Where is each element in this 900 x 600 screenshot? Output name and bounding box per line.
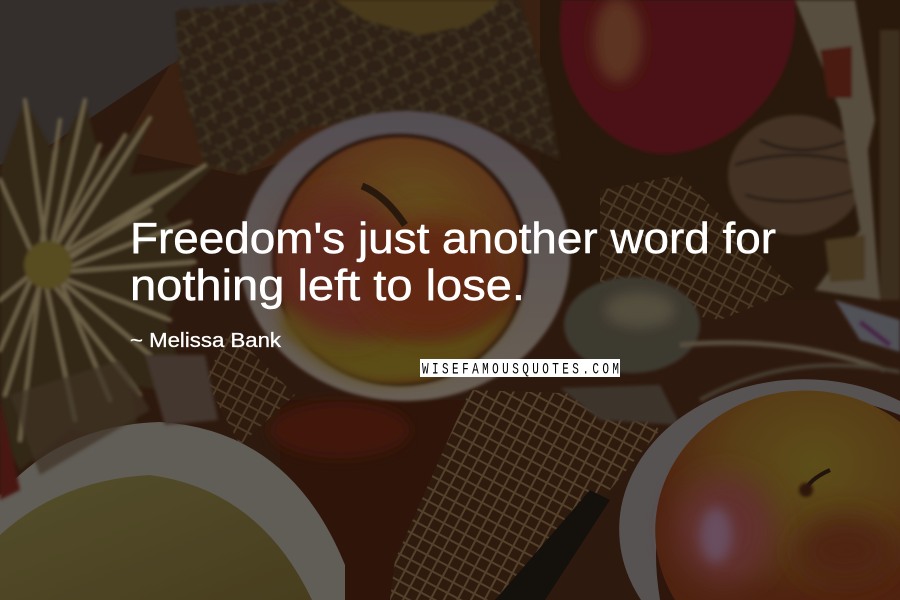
watermark logo: WISEFAMOUSQUOTES.COM	[422, 362, 619, 379]
quote text: Freedom's just another word for	[130, 214, 776, 263]
white bowl bottom left	[0, 422, 345, 600]
walnut	[728, 115, 864, 235]
folk fabric ribbon	[795, 0, 900, 352]
author attribution: ~ Melissa Bank	[130, 330, 282, 352]
dark knife	[495, 490, 610, 600]
apple top right	[560, 0, 795, 154]
quote text	[130, 214, 776, 310]
quote text: nothing left to lose.	[130, 261, 525, 310]
apple bowl left	[240, 111, 570, 458]
straw star	[0, 100, 215, 470]
apple bowl bottom right	[619, 379, 900, 600]
gold lace decoration	[175, 0, 560, 175]
spoon and fork	[560, 277, 900, 425]
burlap	[205, 175, 795, 600]
folk cards left	[0, 355, 218, 500]
